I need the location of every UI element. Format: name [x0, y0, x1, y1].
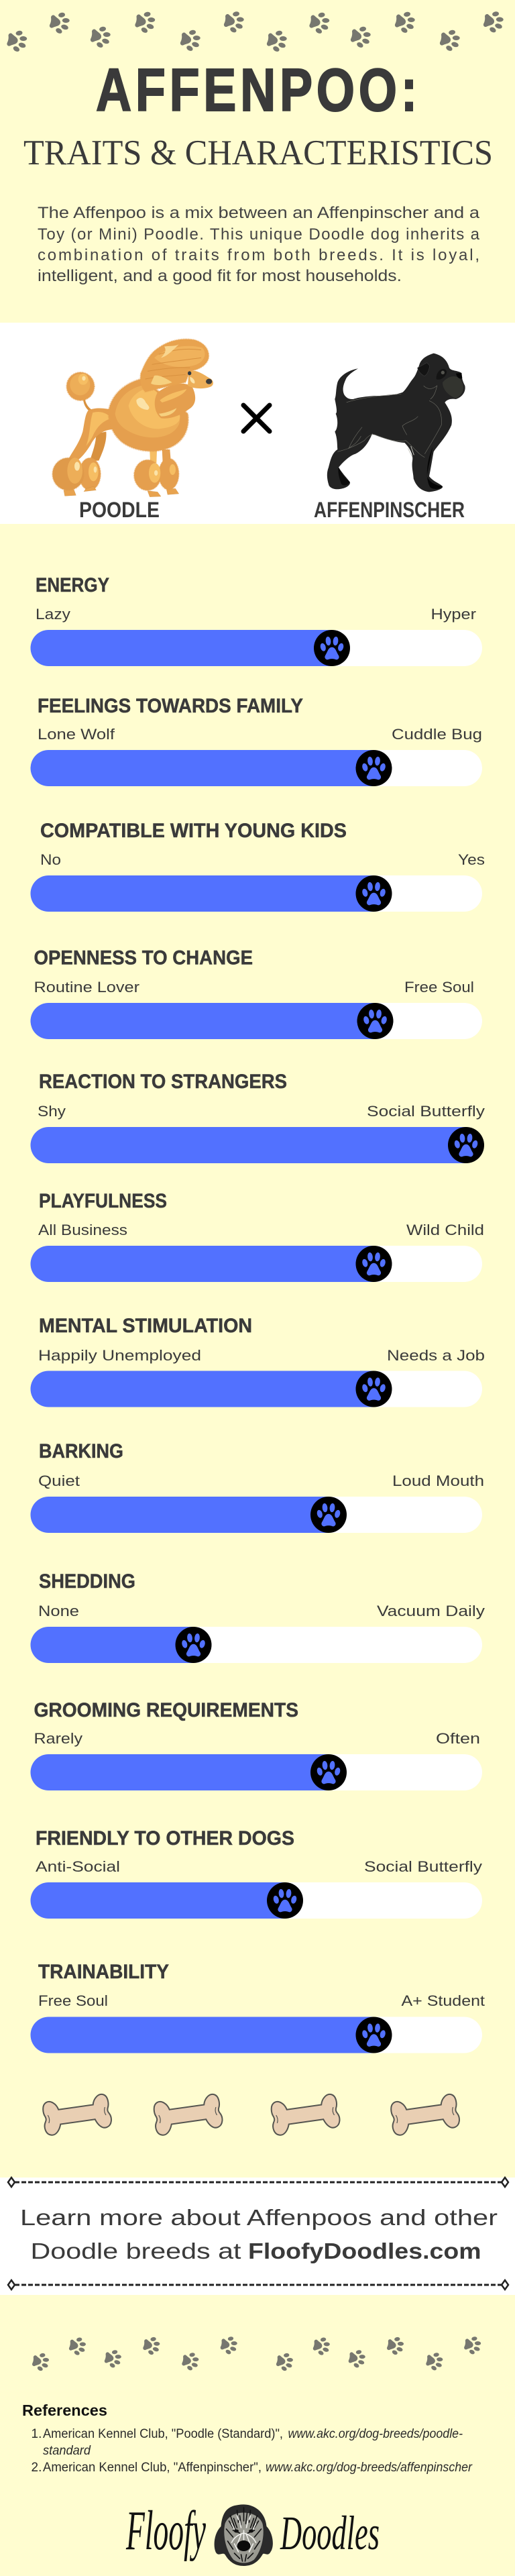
slider bar [31, 630, 482, 666]
reference list: www.akc.org/dog-breeds/poodle- [288, 2427, 463, 2441]
panel: parent breeds [0, 323, 515, 524]
scale labels: Lone Wolf [38, 726, 115, 743]
heading: ENERGY [36, 574, 109, 596]
logo word: Floofy: Floofy [125, 2500, 206, 2562]
illustration: poodle [52, 339, 213, 497]
scale labels [36, 606, 476, 623]
scale labels: Loud Mouth [392, 1472, 484, 1489]
scale labels: All Business [38, 1222, 127, 1238]
heading: FEELINGS TOWARDS FAMILY [38, 695, 303, 717]
trait: shedding [31, 1570, 485, 1663]
intro paragraph: combination of traits from both breeds. It is loyal, [38, 246, 479, 264]
slider bar [31, 1882, 482, 1919]
scale labels: Quiet [38, 1472, 80, 1489]
subtitle: TRAITS & CHARACTERISTICS [23, 133, 493, 172]
call to action text: Learn more about Affenpoos and other [20, 2205, 498, 2230]
trait: reaction to strangers [31, 1071, 485, 1163]
trait: feelings towards family [31, 695, 482, 786]
scale labels: Hyper [431, 606, 476, 623]
heading: OPENNESS TO CHANGE [34, 947, 253, 969]
scale labels: Often [436, 1730, 480, 1747]
heading: TRAINABILITY [38, 1961, 169, 1983]
scale labels: A+ Student [401, 1992, 485, 2009]
slider bar [31, 875, 482, 912]
references heading: References [22, 2402, 107, 2419]
trait: trainability [31, 1961, 485, 2053]
heading: SHEDDING [39, 1570, 135, 1593]
scale labels [38, 1103, 485, 1120]
reference list: 1. [31, 2427, 42, 2441]
scale labels [38, 1222, 484, 1238]
title: AFFENPOO: [96, 57, 421, 124]
slider bar [31, 1627, 482, 1663]
paw print border: bottom [31, 2334, 482, 2373]
icons: dog bones row [42, 2094, 461, 2136]
slider bar [31, 2017, 482, 2053]
trait: barking [31, 1440, 484, 1533]
scale labels: Vacuum Daily [377, 1603, 485, 1619]
reference list: www.akc.org/dog-breeds/affenpinscher [266, 2461, 473, 2475]
scale labels [38, 1992, 485, 2009]
heading: FRIENDLY TO OTHER DOGS [36, 1827, 294, 1849]
heading: GROOMING REQUIREMENTS [34, 1699, 298, 1721]
scale labels [34, 979, 474, 996]
trait: compatible with young kids [31, 820, 485, 912]
logo icon: doodle dog head [215, 2504, 273, 2566]
scale labels: Anti-Social [36, 1858, 120, 1875]
call to action text: FloofyDoodles.com [248, 2239, 481, 2263]
reference list: standard [43, 2444, 91, 2458]
scale labels [38, 1347, 485, 1364]
heading: BARKING [39, 1440, 123, 1462]
slider bar [31, 1497, 482, 1533]
scale labels: Free Soul [38, 1992, 108, 2009]
trait: playfulness [31, 1190, 484, 1282]
reference list [31, 2427, 473, 2475]
slider bar [31, 1127, 484, 1163]
slider bar [31, 1246, 482, 1282]
scale labels [38, 1603, 485, 1619]
trait: openness to change [31, 947, 482, 1039]
icon: cross symbol [243, 405, 270, 431]
logo: Floofy Doodles [125, 2500, 380, 2566]
slider bar [31, 1371, 482, 1407]
trait: friendly to other dogs [31, 1827, 482, 1919]
scale labels [36, 1858, 482, 1875]
scale labels: No [40, 851, 61, 868]
intro paragraph: The Affenpoo is a mix between an Affenpinscher and a [38, 204, 480, 222]
illustration: affenpinscher [327, 354, 465, 492]
scale labels: Routine Lover [34, 979, 139, 996]
heading: PLAYFULNESS [39, 1190, 167, 1212]
panel: call to action [0, 2178, 515, 2295]
scale labels: Cuddle Bug [392, 726, 482, 743]
scale labels: Social Butterfly [364, 1858, 482, 1875]
intro paragraph: Toy (or Mini) Poodle. This unique Doodle dog inherits a [38, 225, 480, 244]
scale labels: Lazy [36, 606, 70, 623]
trait: mental stimulation [31, 1315, 485, 1407]
call to action text [20, 2205, 498, 2263]
scale labels [38, 726, 482, 743]
trait: grooming requirements [31, 1699, 482, 1790]
scale labels [34, 1730, 480, 1747]
scale labels: Needs a Job [387, 1347, 485, 1364]
label: poodle: POODLE [79, 498, 160, 522]
scale labels [38, 1472, 484, 1489]
intro paragraph: intelligent, and a good fit for most households. [38, 267, 402, 285]
scale labels: Wild Child [406, 1222, 484, 1238]
scale labels: Happily Unemployed [38, 1347, 201, 1364]
label: affenpinscher: AFFENPINSCHER [314, 498, 465, 522]
slider bar [31, 750, 482, 786]
call to action text: Doodle breeds at [31, 2239, 241, 2263]
logo word: Doodles: Doodles [280, 2506, 380, 2560]
heading: REACTION TO STRANGERS [39, 1071, 287, 1093]
scale labels: Rarely [34, 1730, 82, 1747]
scale labels: Free Soul [404, 979, 474, 996]
reference list: American Kennel Club, "Affenpinscher", [43, 2461, 262, 2475]
references [22, 2402, 473, 2475]
paw print border: top [6, 9, 505, 54]
scale labels: Shy [38, 1103, 66, 1120]
trait: energy [31, 574, 482, 666]
scale labels: Social Butterfly [367, 1103, 485, 1120]
slider bar [31, 1003, 482, 1039]
slider bar [31, 1754, 482, 1790]
reference list: 2. [31, 2461, 42, 2475]
scale labels [40, 851, 485, 868]
scale labels: None [38, 1603, 79, 1619]
reference list: American Kennel Club, "Poodle (Standard)", [43, 2427, 283, 2441]
heading: MENTAL STIMULATION [39, 1315, 252, 1337]
heading: COMPATIBLE WITH YOUNG KIDS [40, 820, 347, 842]
scale labels: Yes [458, 851, 485, 868]
intro paragraph [38, 204, 480, 285]
